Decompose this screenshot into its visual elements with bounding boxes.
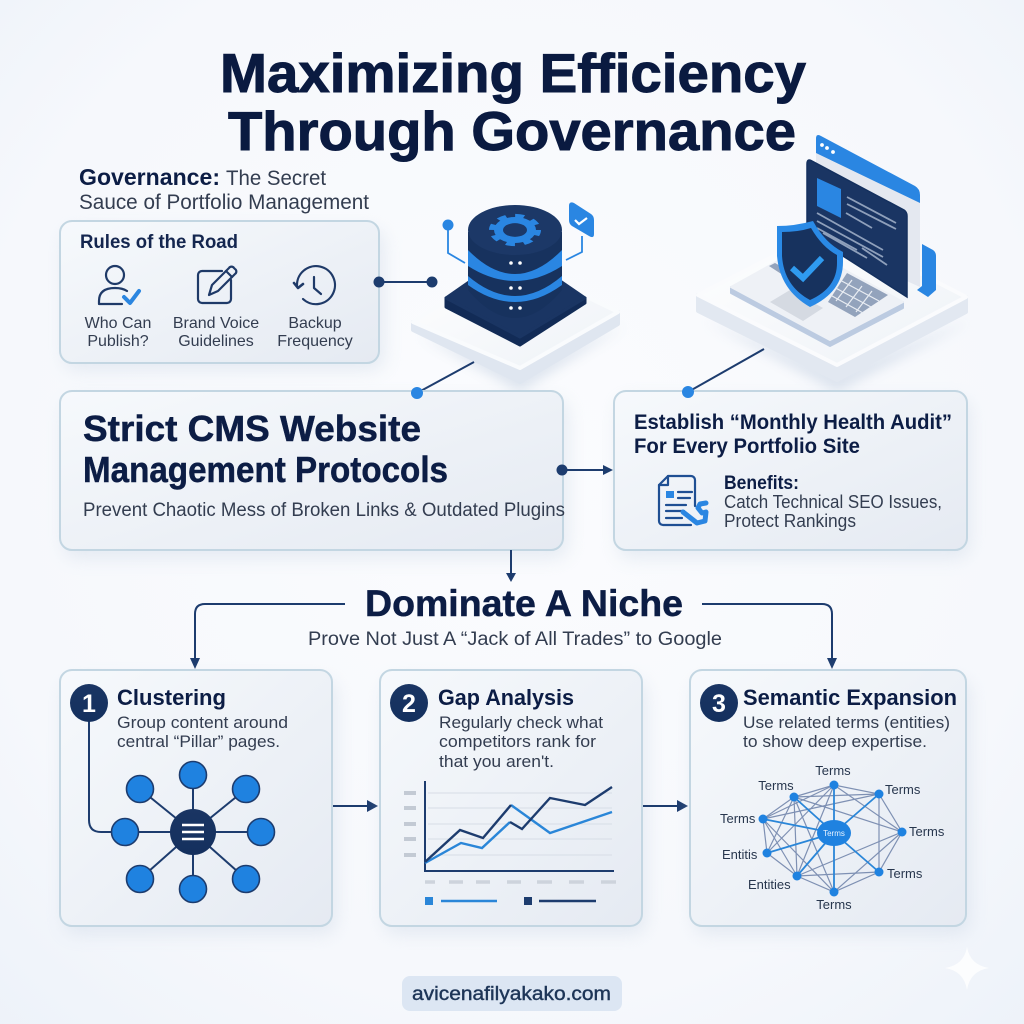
text: gap analysis description: that you aren't.: [439, 752, 554, 771]
connector: rules to server: [374, 277, 437, 287]
label: who can publish: Publish?: [87, 333, 149, 350]
network diagram: Terms: [758, 778, 794, 793]
badge: 2: [390, 684, 428, 722]
label: brand voice guidelines: Brand Voice: [173, 315, 259, 332]
footer: website pill: [402, 976, 622, 1011]
title: Maximizing Efficiency: [220, 42, 806, 104]
heading: strict CMS: Strict CMS Website: [83, 408, 421, 449]
subtitle: governance: Governance:: [79, 164, 220, 190]
text: clustering description: central “Pillar” pages.: [117, 732, 280, 751]
arrow: gap analysis to semantic expansion: [643, 800, 688, 812]
badge: 1: 1: [82, 690, 96, 718]
heading: strict CMS: Management Protocols: [83, 449, 448, 490]
subtitle: governance: The Secret: [226, 167, 326, 190]
arrow: niche to semantic expansion: [702, 604, 837, 669]
network diagram: Terms: [720, 811, 756, 826]
text: gap analysis description: Regularly check what: [439, 713, 603, 732]
network diagram: Terms: [887, 866, 923, 881]
heading: clustering: Clustering: [117, 685, 226, 710]
network diagram: Entitis: [722, 847, 758, 862]
icon: pencil on document: [198, 267, 236, 303]
panel: clustering: [60, 670, 336, 934]
badge: 3: [700, 684, 738, 722]
text: benefits: Catch Technical SEO Issues,: [724, 492, 942, 512]
label: backup frequency: Frequency: [277, 333, 353, 350]
icon: backup clock: [294, 266, 335, 304]
title: Through Governance: [228, 100, 796, 162]
network diagram: Terms: [823, 829, 845, 838]
badge: 3: 3: [712, 690, 726, 718]
network diagram: Terms: [815, 763, 851, 778]
arrow: niche to clustering: [190, 604, 345, 669]
arrow: CMS to audit: [556, 464, 613, 476]
text: semantic description: to show deep expertise.: [743, 732, 927, 751]
heading: dominate a niche: Dominate A Niche: [365, 583, 683, 624]
icon: user with check: [99, 266, 139, 304]
text: niche subheading: Prove Not Just A “Jack of All Trades” to Google: [308, 629, 722, 650]
arrow: CMS down to niche: [506, 550, 516, 582]
text: benefits: [724, 473, 942, 531]
label: brand voice guidelines: Guidelines: [178, 333, 254, 350]
icon: document with wrench: [659, 476, 706, 525]
heading: rules of the road: Rules of the Road: [80, 232, 238, 253]
line: step connector: [89, 715, 115, 832]
title: [220, 42, 806, 162]
text: benefits: Benefits:: [724, 473, 799, 494]
heading: semantic expansion: Semantic Expansion: [743, 685, 957, 710]
subtitle: governance: [79, 164, 369, 214]
connector: server to CMS panel: [417, 362, 474, 393]
text: gap analysis description: competitors rank for: [439, 732, 596, 751]
network diagram: Entities: [748, 877, 791, 892]
badge: 1: [70, 684, 108, 722]
arrow: clustering to gap analysis: [333, 800, 378, 812]
text: benefits: Protect Rankings: [724, 511, 856, 531]
line chart: [404, 781, 616, 905]
network diagram: Terms: [909, 824, 945, 839]
heading: audit: Establish “Monthly Health Audit”: [634, 411, 952, 434]
panel: monthly health audit: [614, 386, 970, 558]
panel: rules of the road: [60, 221, 384, 370]
label: backup frequency: Backup: [288, 315, 342, 332]
network diagram: [720, 763, 945, 912]
illustration: server stack: [413, 202, 625, 392]
connector: laptop to audit panel: [688, 349, 764, 392]
text: CMS description: Prevent Chaotic Mess of Broken Links & Outdated Plugins: [83, 500, 565, 521]
text: clustering description: Group content around: [117, 713, 288, 732]
subtitle: governance: Sauce of Portfolio Management: [79, 191, 369, 214]
text: semantic description: Use related terms (entities): [743, 713, 950, 732]
diagram: hub and spoke: [112, 762, 274, 902]
network diagram: Terms: [816, 897, 852, 912]
network diagram: Terms: [885, 782, 921, 797]
heading: gap analysis: Gap Analysis: [438, 685, 574, 710]
label: who can publish: Who Can: [85, 315, 151, 332]
panel: gap analysis: [380, 670, 646, 934]
panel: semantic expansion: [690, 670, 970, 934]
badge: 2: 2: [402, 690, 416, 718]
panel: strict CMS protocols: [60, 387, 568, 558]
illustration: laptop with shield: [698, 135, 972, 392]
heading: audit: For Every Portfolio Site: [634, 435, 860, 458]
footer: website pill: avicenafilyakako.com: [412, 984, 611, 1005]
icon: sparkle: [945, 947, 989, 990]
